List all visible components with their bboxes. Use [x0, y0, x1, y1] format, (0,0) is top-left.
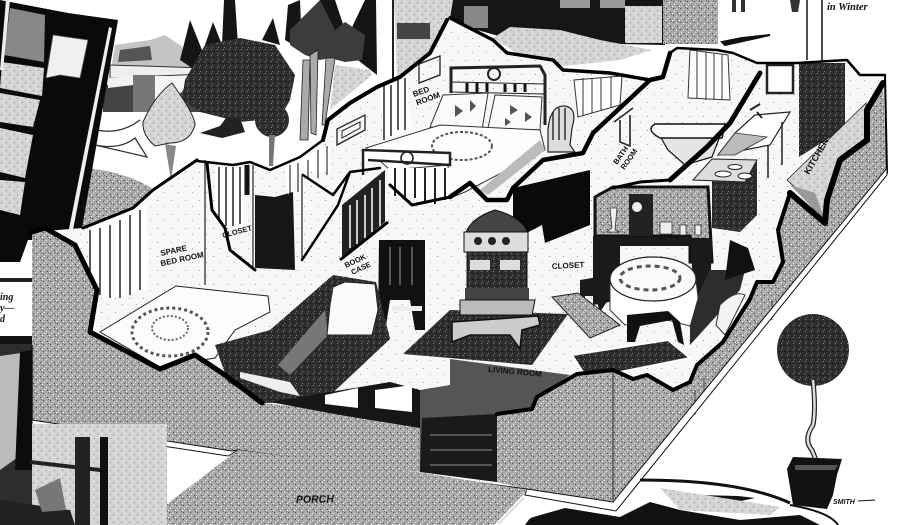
cropped caption at left: ing	[0, 292, 13, 303]
wooden chair	[378, 240, 425, 332]
vases	[607, 208, 701, 235]
spare bed room rug	[100, 286, 270, 367]
stove body	[464, 232, 528, 252]
closet curtain	[215, 167, 245, 228]
picture frame	[337, 115, 365, 145]
bed room curtain	[380, 78, 412, 140]
front outer wall	[32, 83, 887, 510]
dining chair	[627, 311, 684, 345]
bath room fixtures	[574, 50, 790, 178]
rocking chair	[548, 106, 575, 152]
porch floor	[165, 450, 527, 525]
cropped caption at left	[0, 278, 32, 344]
living room rug	[403, 310, 568, 365]
label: bed room	[412, 82, 441, 107]
upper curtain	[285, 145, 330, 195]
label: living room: LIVING ROOM	[488, 365, 543, 379]
bath tub	[660, 136, 720, 165]
room labels	[158, 82, 639, 278]
bed headboard	[451, 66, 545, 125]
tall dark cypress trees	[180, 0, 377, 75]
book case	[340, 170, 388, 260]
label: spare bed room: SPARE	[160, 243, 188, 258]
label: closet centre: CLOSET	[552, 260, 585, 271]
label: bath room	[611, 142, 639, 171]
distant cottage and lawn	[80, 35, 205, 228]
stove dome	[465, 210, 528, 235]
label: closet left: CLOSET	[221, 223, 253, 240]
kitchen range	[693, 159, 757, 232]
framed window at upper left	[0, 0, 118, 262]
lower left house view	[0, 344, 167, 525]
closet doorway under bed room	[513, 170, 590, 243]
bed	[363, 66, 575, 205]
large dark tree	[182, 38, 295, 122]
china cabinet by kitchen	[690, 240, 755, 345]
broken wall edges	[32, 18, 887, 414]
heating stove	[452, 210, 540, 349]
label: spare bed room	[158, 240, 205, 268]
bed pillows	[430, 93, 542, 130]
mantel with clock	[593, 187, 712, 305]
artist signature: SMITH	[833, 499, 856, 506]
label: porch: PORCH	[296, 493, 334, 506]
kitchen counter	[787, 103, 867, 223]
label: book case	[343, 252, 372, 278]
artist signature	[833, 499, 875, 506]
living room floor and doorway	[420, 359, 570, 482]
picture frame upper	[419, 56, 440, 83]
bedspread	[366, 125, 545, 198]
settee base with windows	[270, 382, 420, 428]
wall base trim	[32, 168, 887, 511]
label: bath room: BATH	[611, 144, 630, 166]
settee cushion	[327, 282, 378, 335]
label: book case: BOOK	[343, 252, 368, 270]
kitchen window	[767, 65, 793, 93]
bed footboard	[363, 150, 450, 175]
dining table	[610, 257, 700, 345]
label: bath room: ROOM	[619, 147, 639, 171]
rear garden scene	[80, 0, 377, 228]
long rug	[572, 340, 690, 372]
label: kitchen: KITCHEN	[802, 136, 831, 176]
small dark tree	[255, 103, 289, 137]
spare bed room curtains	[88, 56, 440, 300]
label: bed room: BED	[412, 85, 431, 99]
pale rounded tree	[143, 83, 195, 146]
slender tall trees	[290, 0, 365, 62]
kitchen sink	[718, 112, 790, 155]
topiary tree	[777, 314, 849, 509]
rear of neighbouring house	[378, 0, 822, 85]
bath room curtain	[574, 50, 730, 117]
label: spare bed room: BED ROOM	[160, 250, 205, 268]
settee	[215, 275, 390, 403]
dark kitchen wall	[799, 63, 845, 157]
lower right garden path	[495, 480, 838, 525]
stove base	[452, 316, 540, 349]
label: bed room: ROOM	[415, 90, 441, 107]
towel rack	[614, 108, 633, 146]
cropped caption at left: y—	[0, 303, 14, 314]
plant pot	[787, 457, 842, 509]
corner rug	[552, 293, 620, 338]
small side chair	[580, 275, 610, 312]
caption: in Winter: in Winter	[827, 2, 868, 13]
label: book case: CASE	[350, 260, 372, 277]
clock	[629, 194, 653, 236]
cropped caption at left: d	[0, 314, 6, 325]
closet doorway by spare room	[255, 192, 295, 270]
porch post	[126, 473, 166, 525]
